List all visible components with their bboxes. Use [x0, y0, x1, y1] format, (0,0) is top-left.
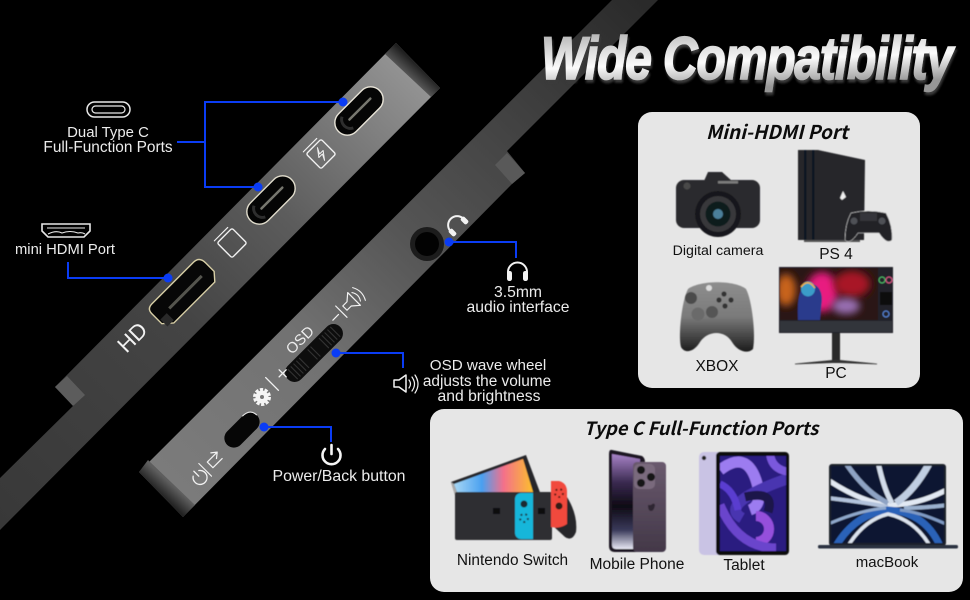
icon: minus and volume [326, 286, 367, 327]
icon: headphones [507, 262, 528, 281]
label: Power/Back button: Power/Back button [272, 468, 406, 485]
icon: PC monitor [776, 267, 893, 364]
panel: Type C Full-Function Ports [430, 409, 963, 592]
3.5mm audio jack [410, 227, 444, 261]
Type C port upper [330, 82, 388, 140]
label: OSD wave wheel: adjusts the volume [423, 373, 551, 390]
icon: speaker [394, 375, 418, 393]
heading: Mini-HDMI Port: Mini-HDMI Port [706, 118, 850, 145]
icon: tablet [699, 452, 790, 555]
end cap of lower bar [139, 460, 195, 517]
OSD wave wheel [281, 320, 347, 386]
label: Dual Type C: Dual Type C [67, 125, 149, 141]
label: OSD wave wheel: and brightness [438, 388, 541, 405]
label: PC: PC [825, 365, 847, 382]
HD marking: HD [112, 317, 152, 357]
label: Mobile Phone: Mobile Phone [590, 556, 684, 573]
label: Digital camera: Digital camera [673, 243, 763, 259]
icon: Xbox controller [680, 282, 754, 352]
upper port bar [0, 43, 440, 530]
heading: Type C Full-Function Ports: Type C Full-Function Ports [584, 415, 820, 441]
label: XBOX: XBOX [695, 358, 739, 375]
icon: mobile phone [609, 450, 666, 552]
icon: digital camera [676, 172, 760, 237]
icon: Type C connector [87, 102, 130, 117]
panel: Mini-HDMI Port [638, 112, 920, 388]
power button [220, 408, 264, 452]
label: mini HDMI Port: mini HDMI Port [15, 242, 115, 258]
label: macBook: macBook [856, 554, 919, 571]
OSD marking: OSD [283, 323, 318, 358]
icon: gear and plus [255, 363, 293, 404]
callout connector: Type C ports [177, 98, 348, 192]
Type C port lower [242, 171, 300, 229]
icon: power symbol [323, 445, 340, 464]
callout connector: OSD wheel [332, 348, 403, 368]
icon: Nintendo Switch [451, 455, 576, 540]
icon: headphones on bar [443, 211, 469, 237]
icon: PS4 console and controller [798, 150, 892, 242]
label: 3.5mm audio interface: audio interface [467, 299, 570, 316]
mini HDMI port [147, 257, 220, 329]
label: 3.5mm audio interface: 3.5mm [494, 284, 542, 301]
label: Full-Function Ports: Full-Function Ports [43, 139, 173, 156]
callout connector: power [260, 422, 331, 442]
label: PS 4: PS 4 [819, 246, 853, 263]
bracket tab [495, 153, 525, 184]
callout connector: mini HDMI [68, 262, 172, 282]
label: OSD wave wheel [423, 357, 551, 405]
icon: tablet outline [214, 226, 247, 258]
callout connector: audio [444, 238, 516, 258]
label: Tablet: Tablet [723, 557, 765, 574]
end cap of upper bar [385, 43, 440, 97]
label: 3.5mm audio interface [467, 284, 570, 316]
lower control bar with band to top edge [139, 0, 658, 517]
label: OSD wave wheel: OSD wave wheel [430, 357, 546, 374]
icon: MacBook [818, 462, 958, 548]
icon: HDMI connector [42, 224, 90, 237]
label: Nintendo Switch: Nintendo Switch [457, 552, 568, 569]
icon: charging tablet [303, 137, 336, 169]
icon: power and back on bar [187, 449, 226, 488]
